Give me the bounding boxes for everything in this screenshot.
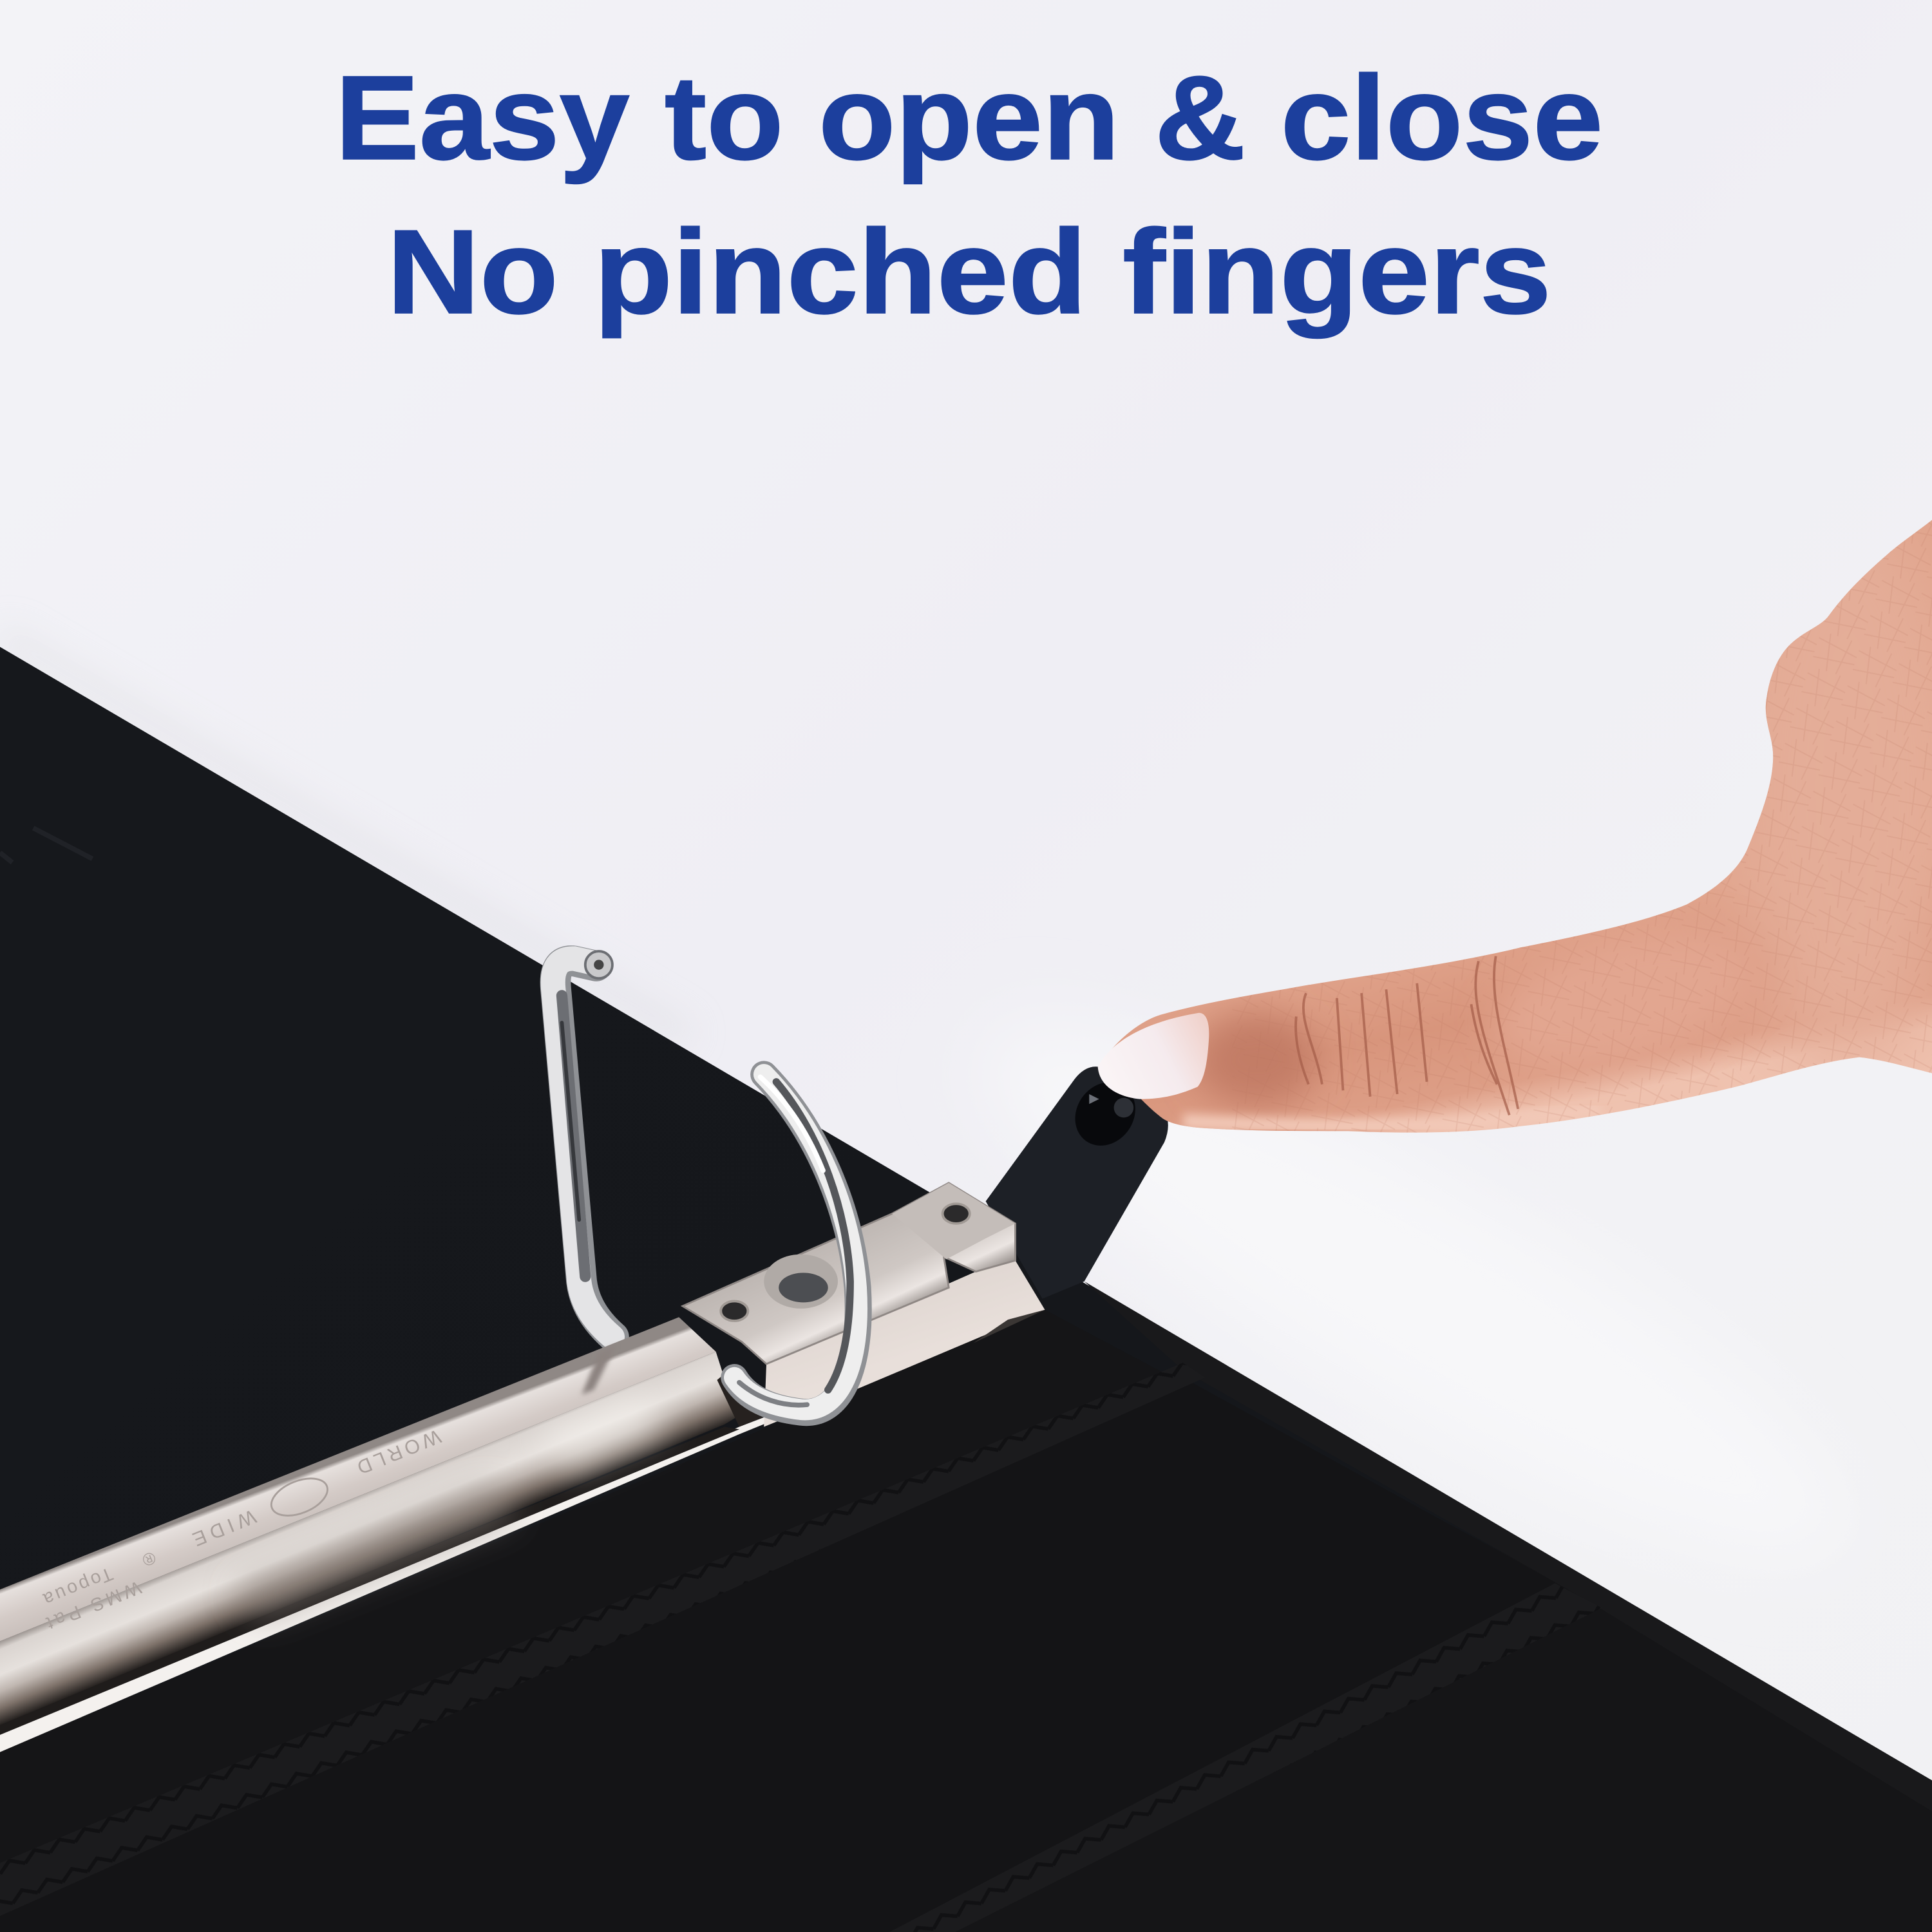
- strip soft reflection: [582, 1345, 616, 1395]
- hand skin texture: [1232, 518, 1932, 1133]
- spine band right: [889, 1584, 1602, 1932]
- rivet rim: [764, 1255, 838, 1309]
- upper plate: [683, 1183, 1016, 1364]
- under shelf dark line: [973, 1310, 1045, 1343]
- finger underside light: [1183, 1109, 1602, 1126]
- right panel rim: [1084, 1282, 1932, 1811]
- binder inside cover: [0, 647, 1932, 1932]
- rivet centre: [779, 1273, 828, 1302]
- plate end cap: [892, 1183, 1016, 1259]
- tab hole highlight: [1089, 1094, 1099, 1104]
- rivet: [764, 1255, 838, 1309]
- finger base tone: [1495, 935, 1741, 1059]
- lower panel shading: [0, 1378, 1589, 1932]
- fingertip dark tone: [1195, 1013, 1318, 1106]
- spine band left: [0, 1363, 1205, 1916]
- soft shadow along binder edge: [0, 634, 690, 1037]
- headline line 1: Easy to open & close: [335, 52, 1603, 185]
- tab body: [986, 1066, 1168, 1299]
- finger and hand silhouette: [1098, 520, 1932, 1133]
- lever tab: [986, 1066, 1168, 1299]
- tube bright reflection: [542, 1395, 665, 1472]
- lower right shelf: [764, 1260, 1045, 1427]
- hand light tone: [1731, 505, 1932, 1072]
- open ring: [734, 1074, 858, 1412]
- D-ring post: [553, 951, 614, 1337]
- headline line 2: No pinched fingers: [387, 205, 1551, 339]
- tab hole centre: [1114, 1098, 1133, 1117]
- hand: [1098, 505, 1932, 1133]
- headline: [335, 52, 1603, 339]
- binder cover: [0, 647, 1932, 1932]
- knuckle wrinkles: [1296, 956, 1518, 1115]
- tab hole: [1063, 1070, 1148, 1157]
- plate hole far: [943, 1204, 970, 1224]
- upper flat strip: [0, 1317, 716, 1641]
- embossed logo: [266, 1471, 333, 1523]
- bar lower white edge: [0, 1310, 1045, 1752]
- embossed text WIDE: WIDE: [185, 1505, 259, 1552]
- plate hole near: [721, 1301, 748, 1321]
- ring slot: [717, 1365, 770, 1427]
- faint marks on cover: [0, 828, 92, 862]
- tube reflections: [234, 1395, 665, 1620]
- embossed text top line: Topoua: [38, 1563, 116, 1611]
- rounded tube: [0, 1352, 737, 1725]
- embossed text patent: WMS Pat: [40, 1577, 144, 1634]
- soft light near binder edge: [934, 951, 1899, 1636]
- fingernail: [1098, 1013, 1209, 1099]
- bar dark underside: [0, 1427, 739, 1735]
- lower spine area: [0, 1310, 1932, 1932]
- embossed text WORLD: WORLD: [350, 1425, 444, 1480]
- tube dark reflection: [234, 1484, 518, 1620]
- skin shading: [1183, 505, 1932, 1133]
- metal binder mechanism: [0, 1183, 1045, 1752]
- embossed registered mark: ®: [139, 1548, 158, 1571]
